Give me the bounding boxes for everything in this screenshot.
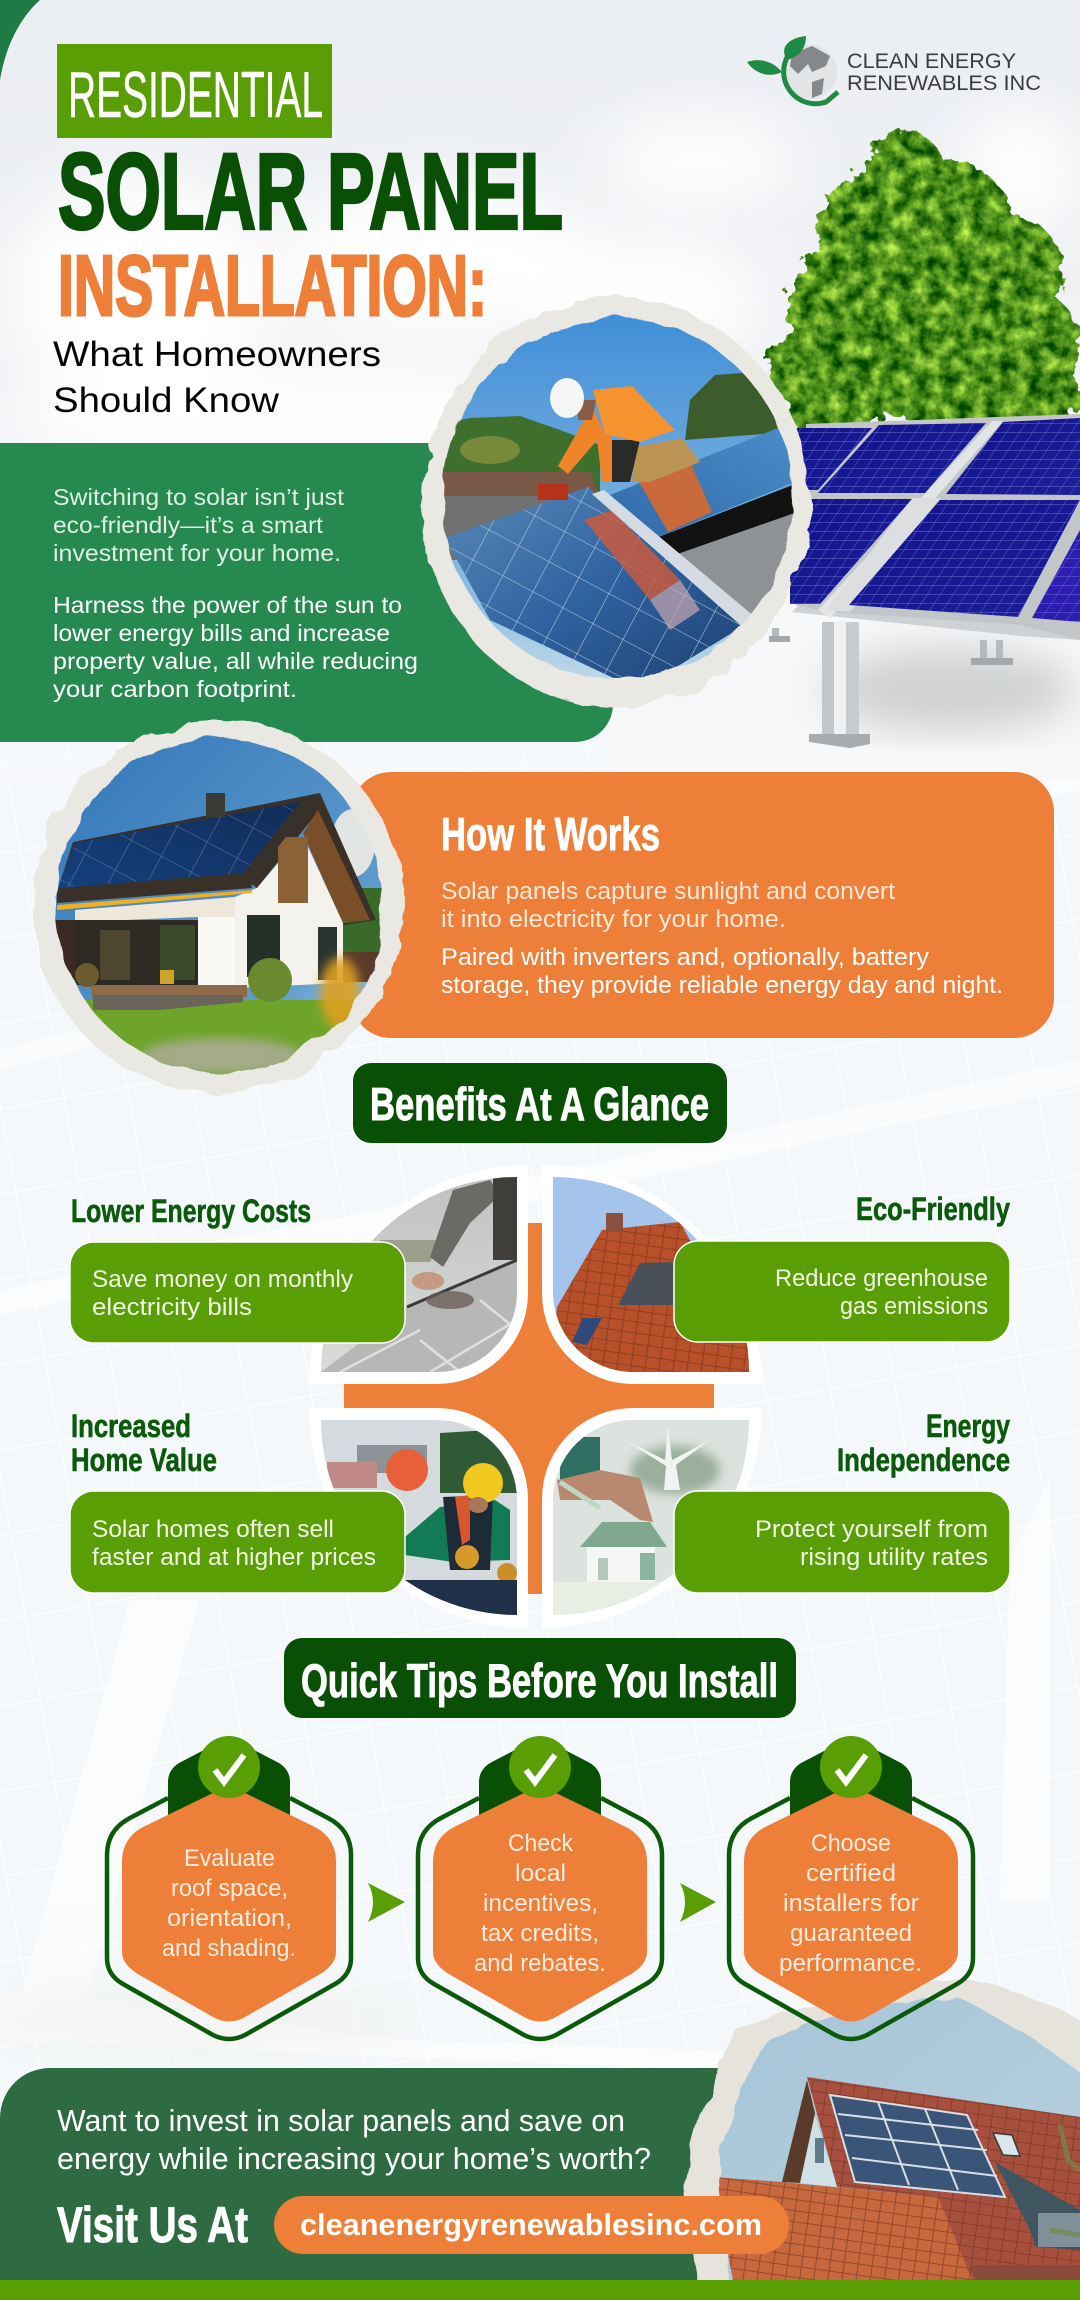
tip 2: incentives, — [483, 1890, 598, 1917]
visit us at: Visit Us At — [57, 2197, 248, 2253]
benefit: lower energy costs: Lower Energy Costs — [71, 1193, 311, 1229]
heading: quick tips: Quick Tips Before You Install — [301, 1654, 778, 1707]
cta text — [57, 2103, 651, 2176]
icon: globe and leaves — [747, 36, 838, 104]
stand foot — [555, 682, 590, 702]
benefit: increased home value: Home Value — [71, 1442, 217, 1478]
tip 2: Check — [508, 1830, 574, 1857]
tip 3: performance. — [779, 1950, 922, 1977]
panel: intro — [0, 443, 613, 742]
panels — [790, 428, 872, 490]
cta text: energy while increasing your home’s worth? — [57, 2141, 651, 2176]
card: Solar homes often sell — [92, 1516, 334, 1543]
subheading: Should Know — [53, 381, 280, 420]
benefits diagram — [309, 1165, 762, 1628]
intro text: Switching to solar isn’t just — [53, 484, 345, 510]
footer bar — [0, 2280, 1080, 2300]
tip 3: guaranteed — [790, 1920, 912, 1947]
logo — [747, 36, 1041, 104]
logo text: RENEWABLES INC — [847, 72, 1041, 95]
torn paper photo: worker on roof — [422, 299, 810, 707]
badge: residential: RESIDENTIAL — [68, 58, 323, 131]
intro text: Harness the power of the sun to — [53, 592, 402, 618]
card: rising utility rates — [800, 1544, 988, 1571]
heading: benefits at a glance: Benefits At A Glance — [370, 1078, 709, 1130]
tip 1: roof space, — [171, 1875, 288, 1902]
heading: how it works: How It Works — [441, 808, 660, 860]
cta text: Want to invest in solar panels and save on — [57, 2103, 625, 2138]
card: Save money on monthly — [92, 1266, 353, 1293]
card — [674, 1241, 1010, 1342]
logo text: CLEAN ENERGY — [847, 50, 1016, 73]
intro text: property value, all while reducing — [53, 648, 418, 674]
benefit: eco-friendly — [674, 1191, 1010, 1342]
panel: how it works — [351, 772, 1054, 1038]
torn paper photo: house — [32, 720, 404, 1092]
photo: panel cleaning — [309, 1165, 528, 1384]
heading: solar panel: SOLAR PANEL — [58, 130, 563, 252]
how it works text: it into electricity for your home. — [441, 906, 786, 933]
card: faster and at higher prices — [92, 1544, 376, 1571]
url pill — [274, 2196, 789, 2254]
intro text: lower energy bills and increase — [53, 620, 390, 646]
subheading — [53, 335, 381, 420]
panel: call to action — [0, 2068, 730, 2280]
torn paper: roof photo — [683, 1980, 1080, 2300]
benefit: eco-friendly: Eco-Friendly — [856, 1191, 1010, 1227]
tip 1: Evaluate — [184, 1845, 275, 1872]
card: Protect yourself from — [755, 1516, 988, 1543]
heading: benefits at a glance — [353, 1063, 727, 1143]
orange cross — [344, 1223, 714, 1594]
tip 1: orientation, — [167, 1905, 292, 1932]
logo text — [847, 50, 1041, 95]
tip 2: local — [515, 1860, 566, 1887]
card: gas emissions — [840, 1293, 988, 1320]
card — [70, 1491, 405, 1593]
arrow 1 — [368, 1883, 405, 1922]
corner swoosh — [0, 0, 40, 80]
solar panel array — [769, 414, 1080, 748]
subheading: What Homeowners — [53, 335, 381, 374]
tip 3: installers for — [783, 1890, 919, 1917]
card — [70, 1242, 405, 1343]
tip 3: Choose — [811, 1830, 891, 1857]
intro text: eco-friendly—it’s a smart — [53, 512, 324, 538]
card: Reduce greenhouse — [775, 1265, 988, 1292]
benefit: increased home value: Increased — [71, 1408, 191, 1444]
tip 2: and rebates. — [474, 1950, 606, 1977]
intro text: your carbon footprint. — [53, 676, 297, 702]
benefit: increased home value — [70, 1408, 405, 1593]
tip 1 — [107, 1736, 351, 2039]
heading: quick tips — [284, 1638, 796, 1718]
title block — [53, 44, 563, 420]
benefit: energy independence — [674, 1408, 1010, 1593]
how it works text: Paired with inverters and, optionally, battery — [441, 944, 929, 971]
tip 2 — [418, 1736, 662, 2039]
tip 3: certified — [806, 1860, 896, 1887]
card: electricity bills — [92, 1294, 252, 1321]
photo: tiled roof — [542, 1165, 762, 1384]
photo: model house — [542, 1408, 762, 1628]
url pill: cleanenergyrenewablesinc.com — [300, 2207, 762, 2242]
arrow 2 — [680, 1883, 716, 1922]
intro text: investment for your home. — [53, 540, 341, 566]
how it works text: storage, they provide reliable energy day and night. — [441, 972, 1003, 999]
tip 3 — [729, 1736, 973, 2039]
tip 2: tax credits, — [481, 1920, 599, 1947]
how it works text — [441, 878, 1003, 999]
how it works text: Solar panels capture sunlight and convert — [441, 878, 895, 905]
badge: residential — [57, 44, 332, 138]
photo: installers — [309, 1408, 528, 1628]
roof photo — [718, 1998, 1080, 2280]
heading: installation: INSTALLATION: — [58, 239, 487, 334]
card — [674, 1491, 1010, 1593]
worker — [538, 378, 700, 500]
benefit: energy independence: Energy — [926, 1408, 1010, 1444]
tree — [766, 132, 1080, 455]
panel frames and legs — [769, 604, 1080, 748]
intro text — [53, 484, 418, 702]
benefit: energy independence: Independence — [837, 1442, 1010, 1478]
benefit: lower energy costs — [70, 1193, 405, 1343]
tip 1: and shading. — [162, 1935, 296, 1962]
